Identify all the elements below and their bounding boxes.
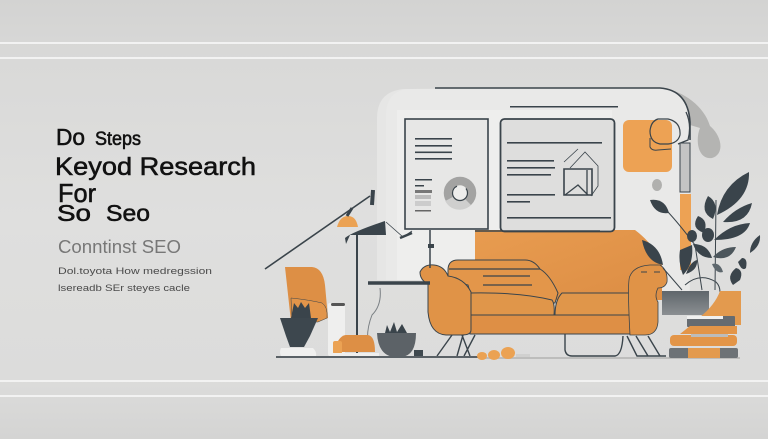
panel: right document: [500, 119, 614, 232]
seats: [470, 293, 554, 315]
body text: [58, 266, 212, 293]
left arm: [420, 265, 471, 335]
back cushions: [448, 260, 558, 303]
body text: lsereadb SEr steyes cacle: [58, 283, 190, 293]
floor line: [276, 356, 740, 359]
chair and plant: [280, 267, 328, 356]
board shadow: [664, 88, 720, 158]
board outline: [435, 88, 690, 140]
panel: left document: [405, 119, 488, 229]
body text: Dol.toyota How medregssion: [58, 266, 212, 276]
illustration: living room with SEO board: [265, 88, 760, 360]
orange tag and magnifier: [623, 112, 691, 270]
chart: donut: [448, 181, 472, 205]
title: So: [57, 200, 91, 226]
bowl plant: [377, 322, 423, 357]
ottoman: [331, 335, 379, 356]
title: [55, 124, 256, 226]
sofa: [420, 231, 667, 356]
icon: house chart: [564, 149, 598, 196]
right arm: [628, 265, 667, 335]
book stack: [700, 291, 741, 325]
pebbles: [477, 347, 530, 360]
title: Steps: [95, 129, 141, 150]
sofa back: [475, 230, 662, 300]
title: Seo: [106, 200, 150, 226]
title: For: [58, 178, 96, 208]
back panel: [377, 88, 690, 300]
title: Do: [56, 124, 85, 150]
sofa legs: [437, 334, 666, 356]
floor lamp and side table: [265, 190, 434, 356]
subtitle: Conntinst SEO: [58, 237, 181, 257]
potted plant: [642, 172, 760, 358]
title: Keyod Research: [55, 153, 256, 181]
candle: [328, 303, 345, 356]
